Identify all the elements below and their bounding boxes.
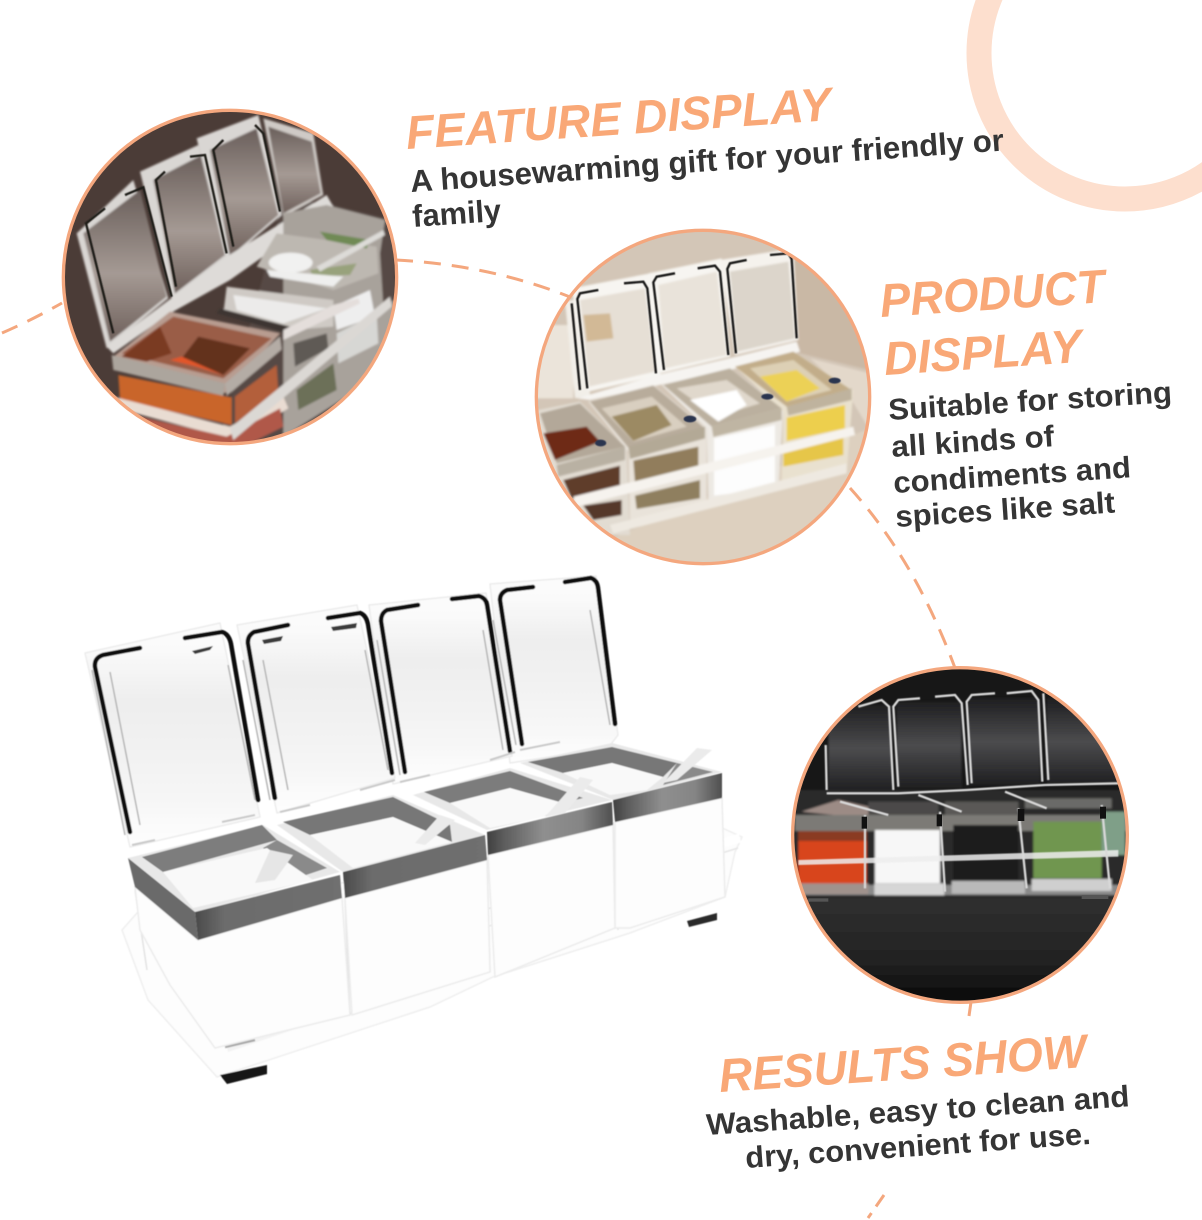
description line 1: Suitable for storing xyxy=(887,376,1173,427)
lid 2 xyxy=(237,605,395,813)
dashed connector: bottom xyxy=(868,1195,884,1218)
description line 3: condiments and xyxy=(892,451,1132,500)
lid 4 xyxy=(490,576,618,763)
description line 2: dry, convenient for use. xyxy=(744,1118,1092,1175)
photo circle: product display, jars with spices on kitchen counter xyxy=(530,225,880,572)
heading: results show: RESULTS SHOW xyxy=(717,1024,1091,1102)
orange circle border xyxy=(536,230,870,564)
jar 2 xyxy=(277,795,490,1015)
lid 1 xyxy=(85,623,260,847)
rubber foot right xyxy=(687,913,717,927)
heading: display: DISPLAY xyxy=(882,319,1087,385)
spoon 3 xyxy=(545,777,593,817)
photo circle: results show, jars on black reflective surface xyxy=(785,665,1135,1005)
lids xyxy=(85,576,618,847)
main product: clear four-compartment spice jar set xyxy=(85,576,742,1084)
dashed connector: product photo to results photo xyxy=(850,488,955,668)
heading: feature display: FEATURE DISPLAY xyxy=(404,77,836,159)
orange circle border xyxy=(63,110,397,444)
orange circle border xyxy=(793,668,1127,1002)
dashed connector: below results photo xyxy=(969,1002,971,1016)
dashed connector: feature photo to product photo xyxy=(396,260,570,297)
text block: product display xyxy=(878,259,1173,534)
rubber foot left xyxy=(220,1065,267,1084)
clear tray base xyxy=(122,822,742,1084)
description: feature display line 1: A housewarming gift for your friendly or xyxy=(409,123,1005,199)
dashed connector: left edge to feature photo xyxy=(2,303,62,333)
description line 4: spices like salt xyxy=(894,486,1116,534)
jar 3 xyxy=(413,768,615,977)
decorative ring top right xyxy=(979,0,1202,199)
jar 1 xyxy=(128,825,350,1048)
description line 1: Washable, easy to clean and xyxy=(705,1080,1130,1142)
jar 4 xyxy=(520,743,725,928)
description: feature display line 2: family xyxy=(411,193,503,234)
text block: feature display xyxy=(404,77,1005,234)
spoon 4 xyxy=(663,748,712,783)
description line 2: all kinds of xyxy=(890,420,1056,464)
heading: product: PRODUCT xyxy=(878,259,1110,327)
spoon 1 xyxy=(255,850,293,883)
text block: results show xyxy=(705,1024,1130,1175)
spoon 2 xyxy=(415,815,455,845)
lid 3 xyxy=(369,593,512,784)
photo circle: feature display, open spice jars on dark wood xyxy=(50,100,410,450)
white shelf highlight xyxy=(798,850,1118,865)
